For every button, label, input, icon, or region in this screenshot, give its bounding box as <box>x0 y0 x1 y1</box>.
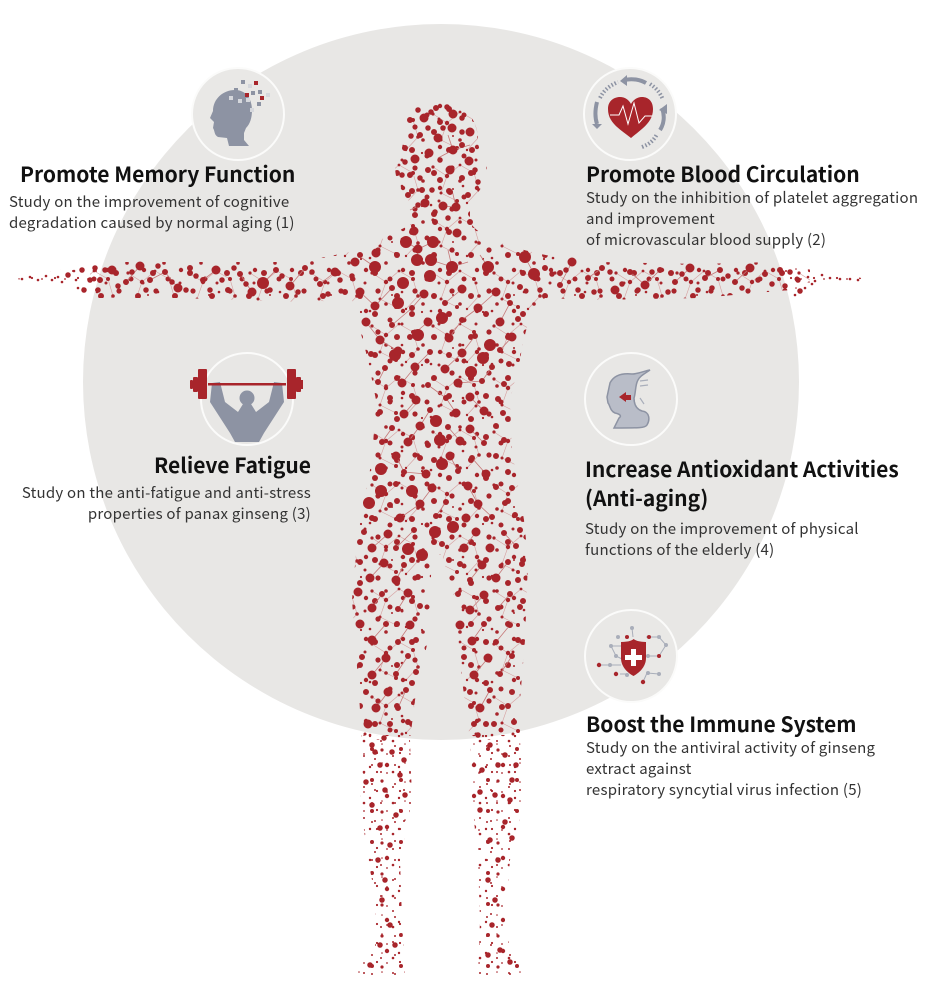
text: memory study: Study on the improvement of cognitive <box>9 191 289 212</box>
text: blood circulation study <box>586 187 918 250</box>
text: antioxidant study <box>585 518 859 560</box>
panel: relieve fatigue <box>22 450 311 524</box>
panel: boost the immune system <box>586 709 875 800</box>
text: memory study <box>9 191 295 233</box>
heading: promote memory function: Promote Memory Function <box>20 159 295 189</box>
heading: increase antioxidant activities <box>585 454 899 513</box>
panel: increase antioxidant activities <box>585 454 899 560</box>
icon: head with memory pixels <box>192 68 284 160</box>
panel: promote blood circulation <box>586 159 918 250</box>
text: fatigue study: Study on the anti-fatigue and anti-stress <box>22 482 311 503</box>
background circle <box>83 24 799 740</box>
icon: shield with cross and molecules <box>585 610 677 702</box>
heading: increase antioxidant activities: Increase Antioxidant Activities <box>585 454 899 484</box>
text: fatigue study <box>22 482 311 524</box>
text: blood circulation study: Study on the inhibition of platelet aggregation <box>586 187 918 208</box>
text: antioxidant study: Study on the improvement of physical <box>585 518 859 539</box>
text: fatigue study: properties of panax ginseng (3) <box>88 503 311 524</box>
text: immune study <box>586 737 875 800</box>
heading: increase antioxidant activities: (Anti-aging) <box>585 483 708 513</box>
text: immune study: respiratory syncytial virus infection (5) <box>586 779 862 800</box>
heading: relieve fatigue: Relieve Fatigue <box>154 450 311 480</box>
heading: boost the immune system: Boost the Immune System <box>586 709 856 739</box>
text: immune study: Study on the antiviral activity of ginseng <box>586 737 875 758</box>
text: blood circulation study: and improvement <box>586 208 715 229</box>
text: blood circulation study: of microvascular blood supply (2) <box>586 229 826 250</box>
text: antioxidant study: functions of the elderly (4) <box>585 539 774 560</box>
icon: heart with circulation arrows <box>584 68 676 160</box>
heading: promote blood circulation: Promote Blood Circulation <box>586 159 860 189</box>
text: memory study: degradation caused by normal aging (1) <box>9 212 295 233</box>
text: immune study: extract against <box>586 758 692 779</box>
panel: promote memory function <box>9 159 295 233</box>
icon: weightlifter with barbell <box>190 353 303 445</box>
icon: head profile with red arrow <box>585 353 677 445</box>
